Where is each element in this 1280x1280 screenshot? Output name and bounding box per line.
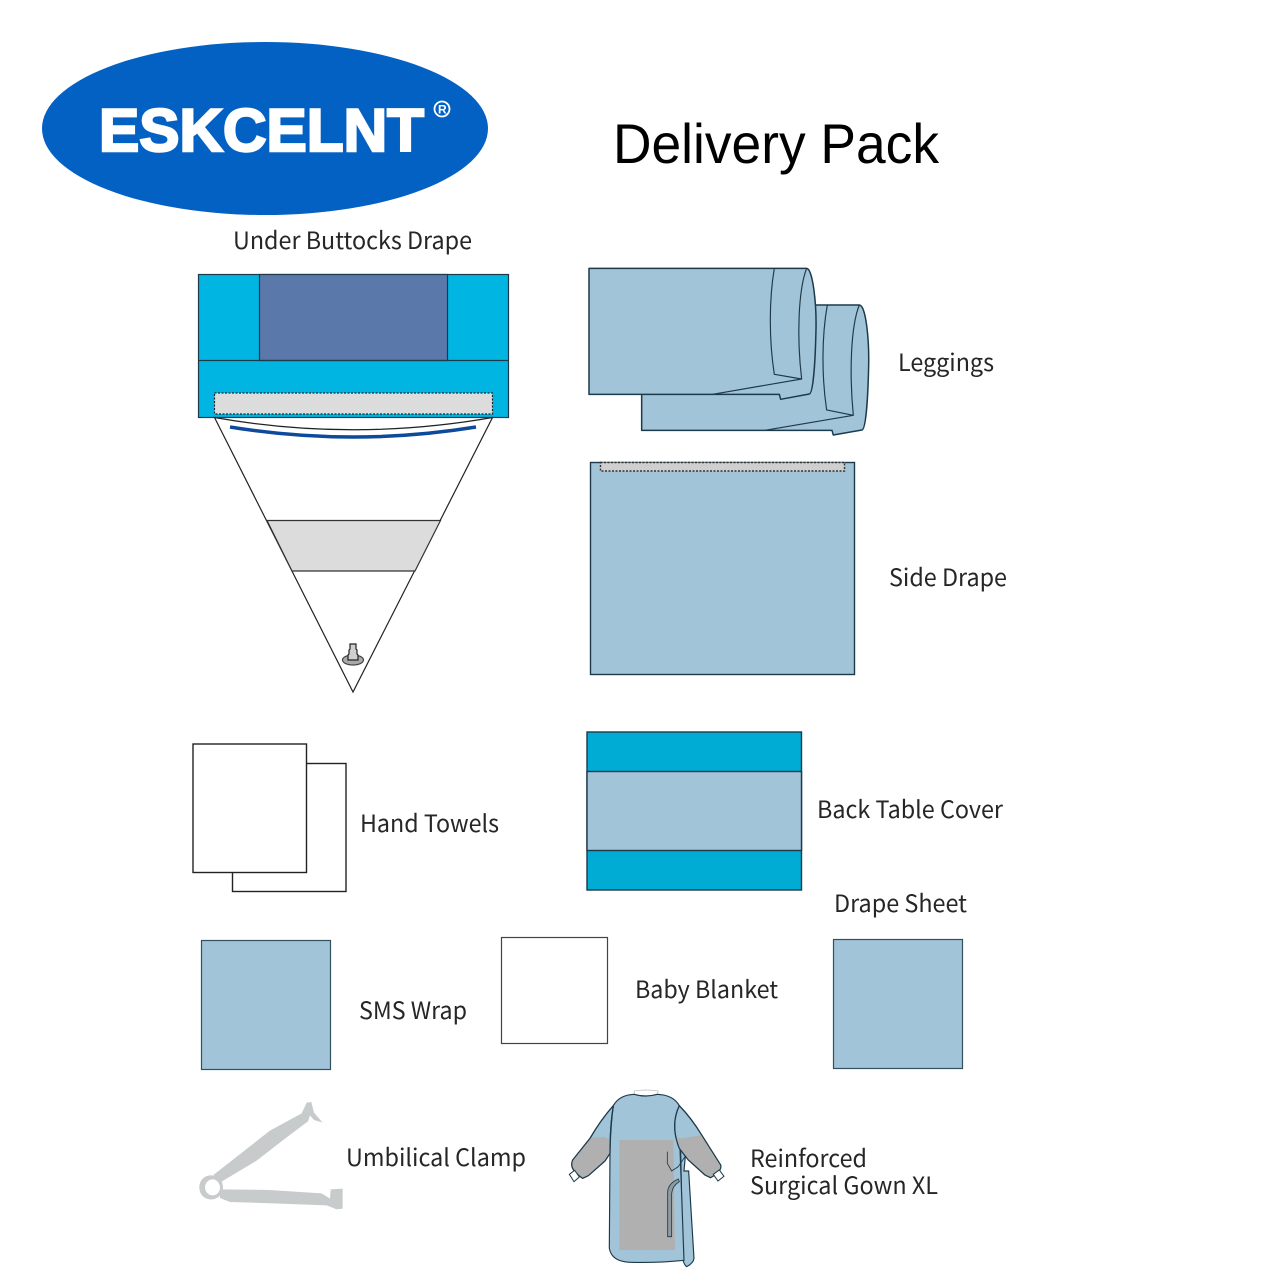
icon: leggings	[589, 268, 869, 435]
icon: umbilical clamp	[199, 1102, 343, 1209]
label: back table cover: Back Table Cover	[817, 790, 1004, 825]
label: hand towels: Hand Towels	[360, 804, 499, 839]
label: leggings: Leggings	[898, 343, 994, 378]
label: baby blanket: Baby Blanket	[635, 970, 778, 1005]
label: side drape: Side Drape	[889, 558, 1007, 593]
label: reinforced surgical gown xl: Reinforced	[750, 1139, 867, 1174]
label: sms wrap: SMS Wrap	[359, 991, 467, 1026]
label: reinforced surgical gown xl: Surgical Gown XL	[750, 1166, 938, 1201]
icon: sms wrap	[202, 940, 330, 1070]
icon: side drape	[590, 462, 854, 674]
icon: baby blanket	[502, 938, 608, 1044]
icon: under buttocks drape	[198, 274, 508, 692]
icon: back table cover	[587, 732, 802, 890]
label: under buttocks drape: Under Buttocks Drape	[233, 221, 472, 256]
title: Delivery Pack	[613, 112, 940, 175]
icon: drape sheet	[834, 940, 962, 1068]
logo: R	[438, 102, 447, 116]
label: drape sheet: Drape Sheet	[834, 884, 967, 919]
icon: surgical gown	[569, 1090, 724, 1267]
label: reinforced surgical gown xl	[750, 1139, 938, 1201]
label: umbilical clamp: Umbilical Clamp	[346, 1138, 526, 1173]
icon: hand towels	[193, 744, 346, 892]
logo: ESKCELNT	[99, 97, 424, 164]
logo	[42, 42, 488, 215]
